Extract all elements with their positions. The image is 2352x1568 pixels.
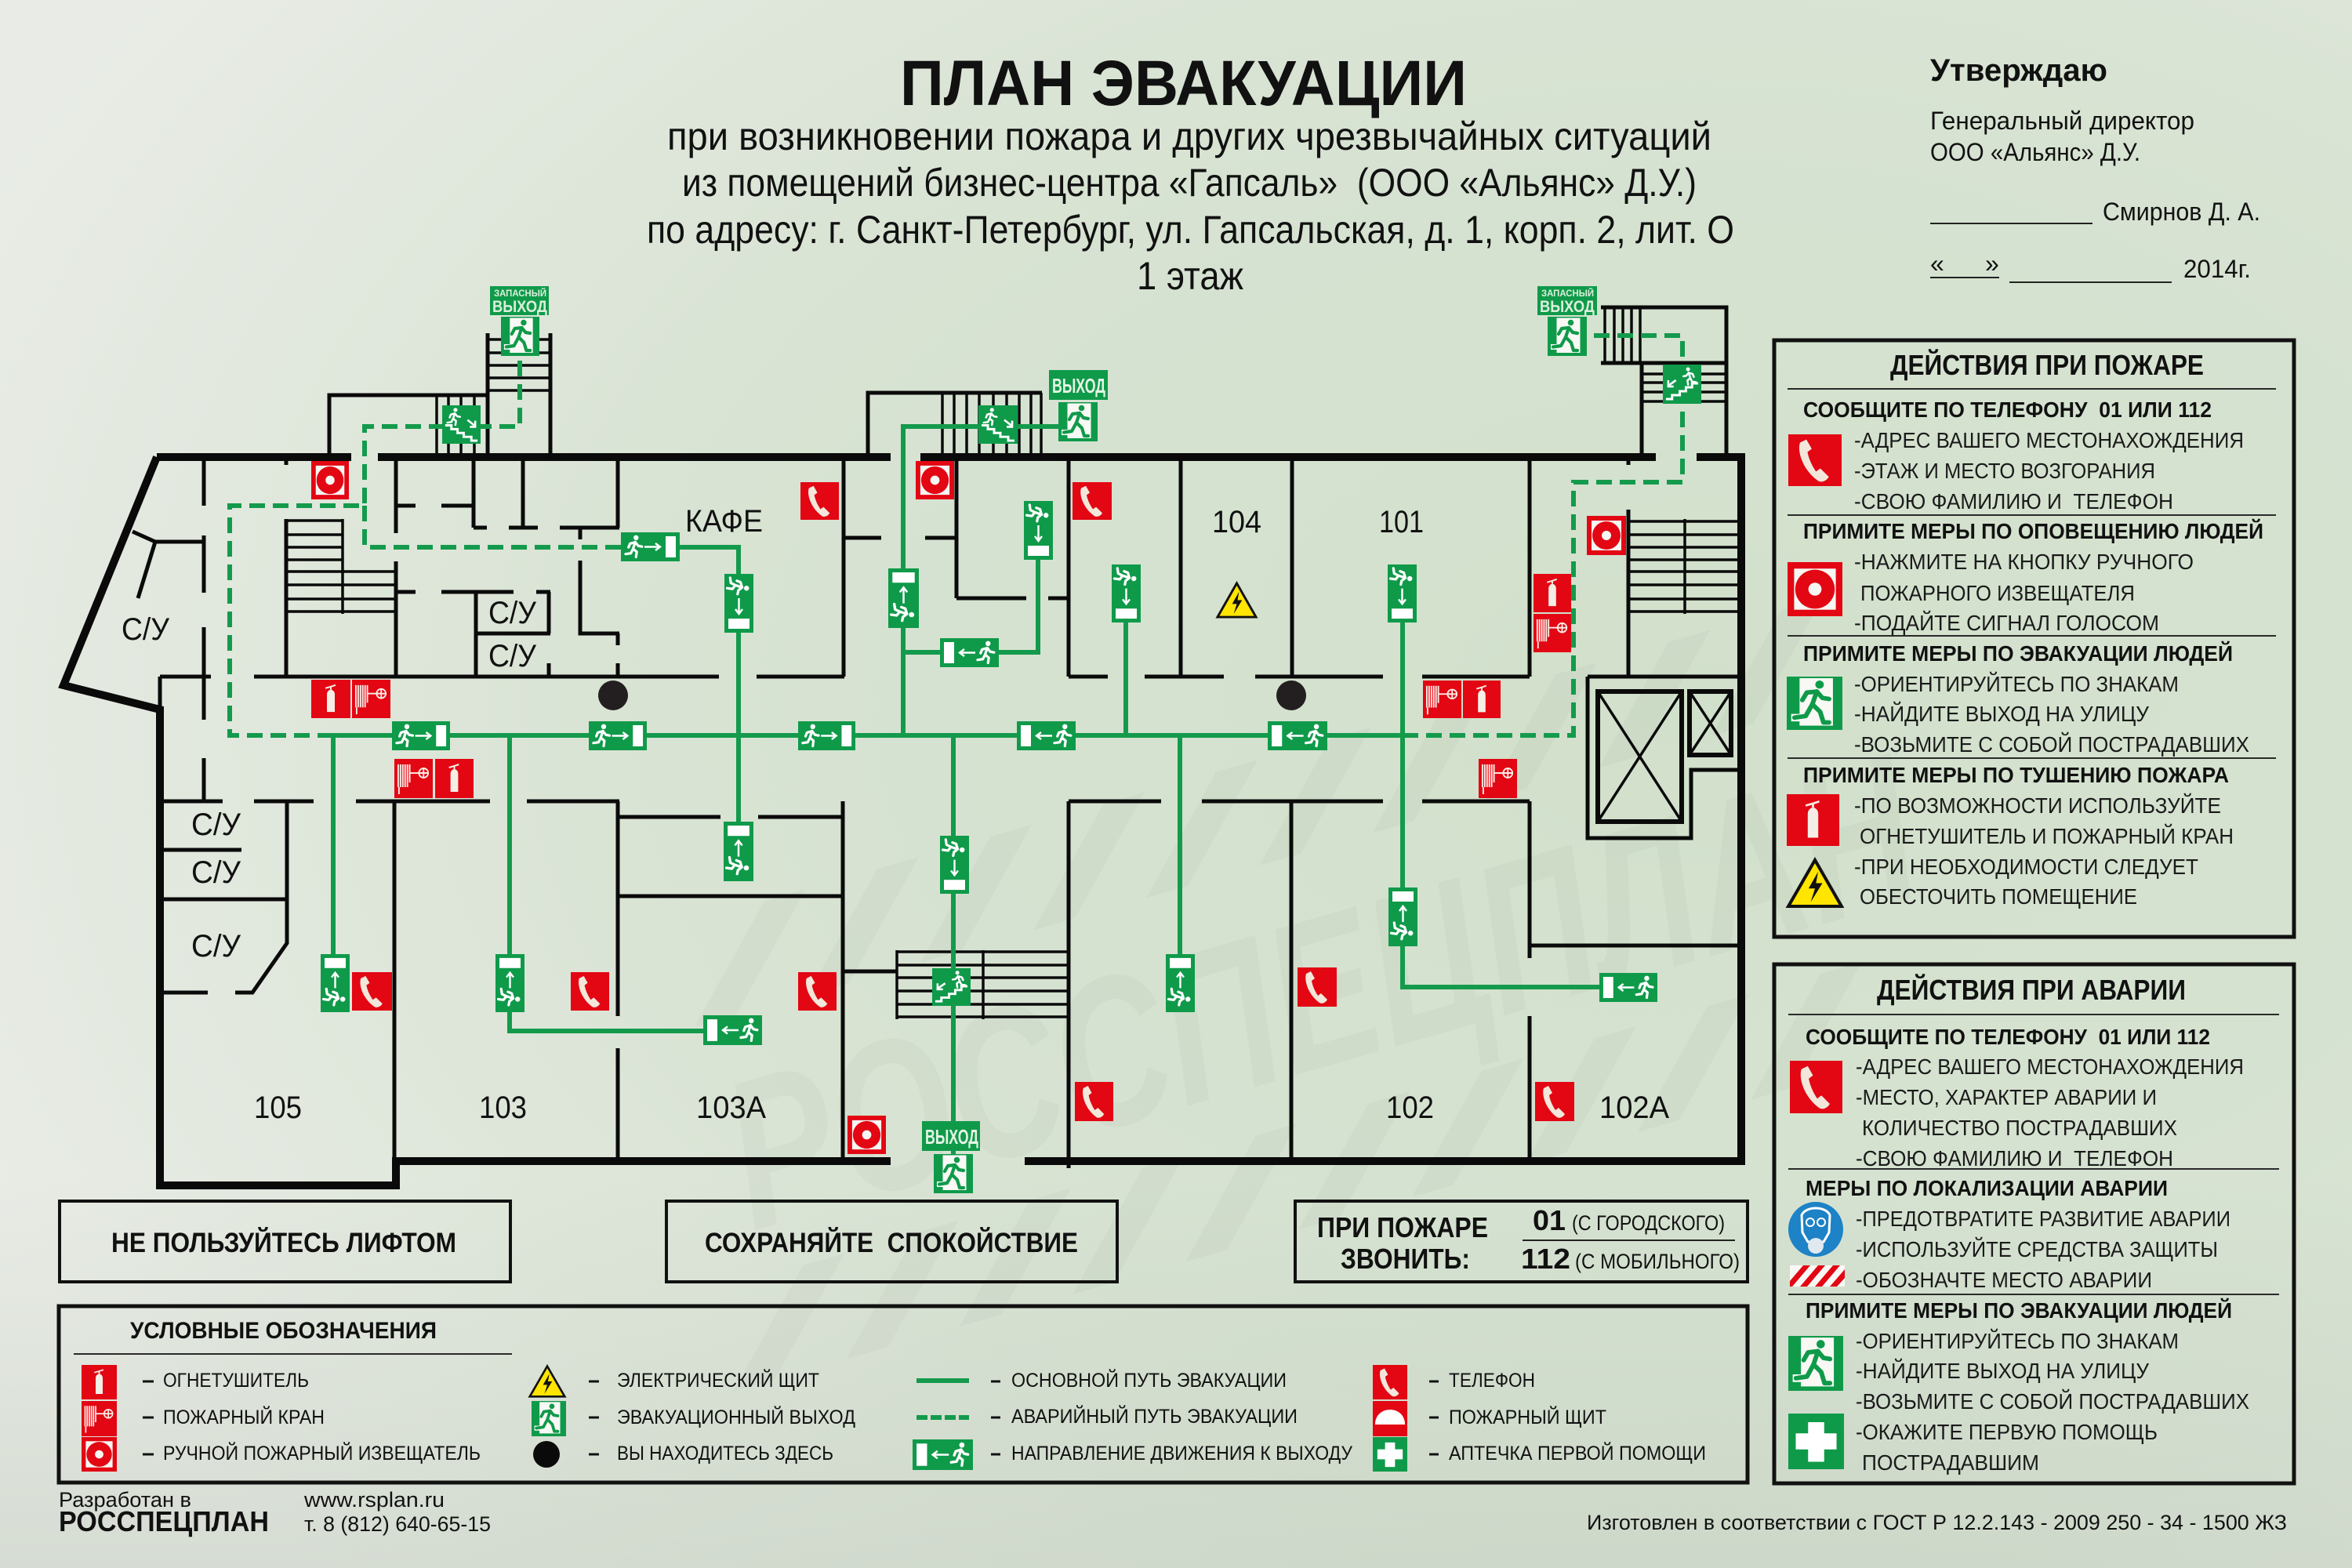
panel heading: ДЕЙСТВИЯ ПРИ ПОЖАРЕ — [1890, 348, 2204, 381]
approval block: Генеральный директор — [1930, 107, 2194, 135]
section: extinguish fire: ОБЕСТОЧИТЬ ПОМЕЩЕНИЕ — [1860, 884, 2137, 909]
extinguishers and hydrants — [311, 574, 1571, 798]
stair annex east — [1601, 307, 1726, 457]
telephones — [352, 482, 1574, 1121]
panel: legend — [59, 1306, 1748, 1483]
legend column 1: ОГНЕТУШИТЕЛЬ — [163, 1370, 309, 1392]
notice: stay calm — [666, 1201, 1117, 1282]
section: evacuate people: -НАЙДИТЕ ВЫХОД НА УЛИЦУ — [1854, 702, 2149, 726]
notice: stay calm: СОХРАНЯЙТЕ СПОКОЙСТВИЕ — [705, 1227, 1078, 1258]
section: evacuate people: -ОРИЕНТИРУЙТЕСЬ ПО ЗНАКАМ — [1854, 672, 2179, 696]
room labels: 103А — [696, 1091, 766, 1125]
section: evacuate people: ПРИМИТЕ МЕРЫ ПО ЭВАКУАЦИИ ЛЮДЕЙ — [1803, 641, 2233, 666]
subtitle: при возникновении пожара и других чрезвычайных ситуаций — [667, 114, 1711, 158]
room labels: С/У — [191, 855, 241, 890]
footer: developer: Разработан в — [59, 1488, 191, 1512]
direction signs — [321, 501, 1657, 1045]
section: localise accident — [1788, 1176, 2230, 1292]
icon: gas mask — [1788, 1202, 1843, 1257]
approval block: » — [1985, 249, 1999, 278]
section: extinguish fire: -ПО ВОЗМОЖНОСТИ ИСПОЛЬЗУЙТЕ — [1854, 793, 2221, 818]
notice: do not use lift: НЕ ПОЛЬЗУЙТЕСЬ ЛИФТОМ — [111, 1227, 456, 1258]
stair annex centre — [862, 393, 1530, 677]
section: alert people: ПОЖАРНОГО ИЗВЕЩАТЕЛЯ — [1860, 581, 2135, 605]
exit signs: ВЫХОД — [1540, 298, 1595, 316]
section: alert people: -НАЖМИТЕ НА КНОПКУ РУЧНОГО — [1854, 550, 2194, 574]
legend column 2: ЭЛЕКТРИЧЕСКИЙ ЩИТ — [617, 1368, 819, 1392]
section: evacuate people — [1787, 641, 2249, 757]
footer: standard note: Изготовлен в соответствии с ГОСТ Р 12.2.143 - 2009 250 - 34 - 1500 ЖЗ — [1587, 1511, 2287, 1534]
section: extinguish fire: ОГНЕТУШИТЕЛЬ И ПОЖАРНЫЙ КРАН — [1860, 824, 2234, 848]
electrical panel icon — [1218, 583, 1256, 617]
approval block — [1930, 53, 2260, 283]
main evacuation routes — [333, 426, 1599, 1154]
legend column 1: РУЧНОЙ ПОЖАРНЫЙ ИЗВЕЩАТЕЛЬ — [163, 1441, 481, 1465]
section: evacuate people: ПОСТРАДАВШИМ — [1862, 1450, 2039, 1475]
approval block: ООО «Альянс» Д.У. — [1930, 138, 2140, 166]
exit signs: ВЫХОД — [925, 1125, 978, 1149]
fire alarm call points — [311, 461, 1626, 1154]
exit signs: ЗАПАСНЫЙ — [494, 287, 546, 299]
room labels: С/У — [488, 639, 537, 673]
legend column 1 — [82, 1365, 481, 1472]
room labels: 102 — [1386, 1091, 1434, 1125]
legend column 2 — [530, 1367, 855, 1468]
section: evacuate people: -ОКАЖИТЕ ПЕРВУЮ ПОМОЩЬ — [1856, 1420, 2158, 1444]
stair annex west — [329, 333, 550, 457]
section: report: СООБЩИТЕ ПО ТЕЛЕФОНУ 01 ИЛИ 112 — [1803, 397, 2212, 422]
footer: developer: www.rsplan.ru — [303, 1488, 445, 1512]
panel heading: ДЕЙСТВИЯ ПРИ АВАРИИ — [1877, 973, 2186, 1006]
subtitle: по адресу: г. Санкт-Петербург, ул. Гапсальская, д. 1, корп. 2, лит. О — [647, 208, 1734, 252]
section: alert people: -ПОДАЙТЕ СИГНАЛ ГОЛОСОМ — [1854, 611, 2159, 635]
section: report: СООБЩИТЕ ПО ТЕЛЕФОНУ 01 ИЛИ 112 — [1806, 1025, 2210, 1049]
panel: actions in case of accident — [1774, 964, 2294, 1483]
section: evacuate people: -ВОЗЬМИТЕ С СОБОЙ ПОСТРАДАВШИХ — [1856, 1389, 2249, 1414]
fire phone numbers — [1295, 1201, 1748, 1282]
section: evacuate people — [1788, 1298, 2249, 1475]
section: extinguish fire — [1787, 763, 2234, 909]
fire phone numbers: (С МОБИЛЬНОГО) — [1575, 1250, 1740, 1273]
section: report: КОЛИЧЕСТВО ПОСТРАДАВШИХ — [1862, 1116, 2177, 1140]
panel: actions in case of fire — [1774, 340, 2294, 937]
exit signs — [490, 286, 1597, 1193]
room labels: С/У — [122, 612, 170, 647]
section: localise accident: МЕРЫ ПО ЛОКАЛИЗАЦИИ АВАРИИ — [1806, 1176, 2168, 1200]
section: report: -СВОЮ ФАМИЛИЮ И ТЕЛЕФОН — [1854, 489, 2173, 514]
stair and lift block east — [1588, 457, 1741, 838]
section: extinguish fire: -ПРИ НЕОБХОДИМОСТИ СЛЕДУЕТ — [1854, 855, 2198, 879]
notice: do not use lift — [60, 1201, 510, 1282]
room labels: С/У — [191, 929, 241, 964]
approval block: « — [1930, 249, 1944, 278]
room labels: С/У — [191, 808, 241, 842]
room labels — [122, 504, 1669, 1125]
footer: developer: РОССПЕЦПЛАН — [59, 1505, 269, 1537]
section: evacuate people: -ВОЗЬМИТЕ С СОБОЙ ПОСТРАДАВШИХ — [1854, 732, 2249, 757]
emergency evacuation routes — [230, 336, 1682, 735]
section: report: -АДРЕС ВАШЕГО МЕСТОНАХОЖДЕНИЯ — [1854, 428, 2244, 452]
section: report — [1788, 397, 2244, 514]
subtitle: из помещений бизнес-центра «Гапсаль» (ООО «Альянс» Д.У.) — [682, 161, 1697, 205]
floor plan — [64, 286, 1741, 1193]
legend column 3: ОСНОВНОЙ ПУТЬ ЭВАКУАЦИИ — [1011, 1368, 1287, 1392]
section: report: -СВОЮ ФАМИЛИЮ И ТЕЛЕФОН — [1856, 1146, 2173, 1171]
title: ПЛАН ЭВАКУАЦИИ — [900, 48, 1467, 119]
legend column 3 — [913, 1368, 1352, 1470]
subtitle — [647, 114, 1734, 298]
footer: developer: т. 8 (812) 640-65-15 — [304, 1512, 491, 1536]
fire phone numbers: 112 — [1521, 1243, 1570, 1275]
section: localise accident: -ИСПОЛЬЗУЙТЕ СРЕДСТВА ЗАЩИТЫ — [1856, 1237, 2218, 1261]
fire phone numbers: 01 — [1533, 1204, 1566, 1236]
fire phone numbers: (С ГОРОДСКОГО) — [1572, 1211, 1725, 1235]
legend column 3: НАПРАВЛЕНИЕ ДВИЖЕНИЯ К ВЫХОДУ — [1011, 1443, 1352, 1465]
approval block: Смирнов Д. А. — [2103, 198, 2260, 226]
exit signs: ЗАПАСНЫЙ — [1541, 287, 1594, 299]
room labels: 103 — [479, 1091, 527, 1125]
south wing walls — [160, 801, 1741, 1168]
room labels: С/У — [488, 596, 537, 630]
stair signs — [442, 365, 1701, 1006]
legend column 4 — [1373, 1365, 1706, 1472]
exit signs: ВЫХОД — [492, 298, 547, 316]
exterior walls — [64, 457, 1741, 1185]
section: evacuate people: ПРИМИТЕ МЕРЫ ПО ЭВАКУАЦИИ ЛЮДЕЙ — [1806, 1298, 2232, 1323]
section: localise accident: -ОБОЗНАЧТЕ МЕСТО АВАРИИ — [1856, 1268, 2152, 1292]
section: report — [1790, 1025, 2244, 1171]
legend column 1: ПОЖАРНЫЙ КРАН — [163, 1405, 325, 1428]
section: evacuate people: -ОРИЕНТИРУЙТЕСЬ ПО ЗНАКАМ — [1856, 1329, 2179, 1353]
section: report: -ЭТАЖ И МЕСТО ВОЗГОРАНИЯ — [1854, 459, 2155, 483]
room labels: КАФЕ — [685, 504, 763, 539]
you are here markers — [598, 681, 1306, 710]
legend column 3: АВАРИЙНЫЙ ПУТЬ ЭВАКУАЦИИ — [1011, 1404, 1298, 1428]
section: alert people — [1788, 518, 2263, 635]
section: evacuate people: -НАЙДИТЕ ВЫХОД НА УЛИЦУ — [1856, 1359, 2149, 1383]
legend column 4: АПТЕЧКА ПЕРВОЙ ПОМОЩИ — [1449, 1441, 1706, 1465]
room labels: 101 — [1379, 505, 1424, 539]
legend column 4: ПОЖАРНЫЙ ЩИТ — [1449, 1405, 1606, 1428]
fire phone numbers: ЗВОНИТЬ: — [1341, 1243, 1470, 1275]
stair flights — [286, 307, 1738, 1019]
section: localise accident: -ПРЕДОТВРАТИТЕ РАЗВИТИЕ АВАРИИ — [1856, 1207, 2230, 1231]
watermark: РОССПЕЦПЛАН — [700, 710, 1945, 1275]
footer: developer — [59, 1488, 491, 1537]
fire phone numbers: ПРИ ПОЖАРЕ — [1317, 1211, 1488, 1243]
legend column 2: ЭВАКУАЦИОННЫЙ ВЫХОД — [617, 1405, 855, 1428]
section: extinguish fire: ПРИМИТЕ МЕРЫ ПО ТУШЕНИЮ ПОЖАРА — [1803, 763, 2229, 787]
watermark — [606, 591, 1973, 1392]
room labels: 102А — [1599, 1091, 1669, 1125]
approval block: Утверждаю — [1930, 53, 2107, 88]
legend heading: УСЛОВНЫЕ ОБОЗНАЧЕНИЯ — [130, 1318, 437, 1344]
interior walls — [132, 457, 881, 801]
room labels: 104 — [1212, 505, 1261, 539]
icon: hazard tape — [1790, 1265, 1845, 1287]
section: alert people: ПРИМИТЕ МЕРЫ ПО ОПОВЕЩЕНИЮ ЛЮДЕЙ — [1803, 518, 2263, 543]
legend column 4: ТЕЛЕФОН — [1449, 1370, 1535, 1392]
legend column 2: ВЫ НАХОДИТЕСЬ ЗДЕСЬ — [617, 1443, 833, 1465]
exit signs: ВЫХОД — [1052, 374, 1105, 397]
approval block: 2014г. — [2183, 255, 2251, 283]
room labels: 105 — [254, 1091, 302, 1125]
section: report: -АДРЕС ВАШЕГО МЕСТОНАХОЖДЕНИЯ — [1856, 1054, 2244, 1079]
section: report: -МЕСТО, ХАРАКТЕР АВАРИИ И — [1856, 1085, 2157, 1109]
subtitle: 1 этаж — [1137, 254, 1243, 298]
